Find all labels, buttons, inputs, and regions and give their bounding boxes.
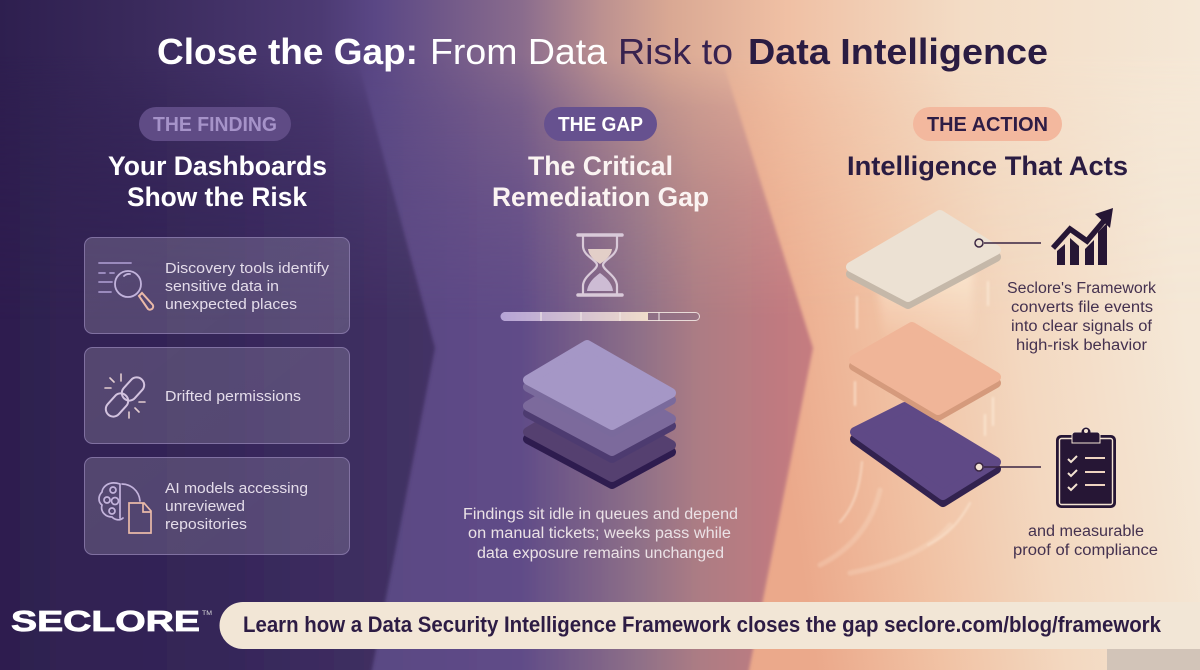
background: top colour band xyxy=(140,0,968,264)
text: drifted permissions: Drifted permissions xyxy=(165,388,301,405)
light streams behind plates xyxy=(820,270,993,573)
badge: the finding xyxy=(139,107,291,141)
heading: intelligence that acts: Intelligence That Acts xyxy=(847,151,1128,181)
logo: seclore: SECLORE xyxy=(11,606,200,638)
text: measurable proof xyxy=(1013,523,1158,559)
badge: the action xyxy=(913,107,1062,141)
plate: bottom xyxy=(855,407,996,502)
heading: the critical remediation gap xyxy=(492,151,709,212)
logo: seclore xyxy=(11,606,212,638)
footer cta bar xyxy=(220,602,1200,649)
chevron: finding panel xyxy=(0,0,435,670)
badge: the action: THE ACTION xyxy=(927,113,1048,136)
text: seclore's framework: converts file events xyxy=(1011,299,1153,316)
layer 1 xyxy=(528,345,671,432)
badge: the gap: THE GAP xyxy=(558,113,643,136)
layer 2 xyxy=(528,371,671,458)
connector: bottom plate to clipboard xyxy=(975,463,1041,471)
panel: the gap xyxy=(463,107,738,562)
heading: your dashboards show the risk xyxy=(108,151,327,212)
badge: the finding: THE FINDING xyxy=(153,113,277,136)
text: findings sit idle: data exposure remains unchanged xyxy=(477,545,724,562)
text: seclore's framework: Seclore's Framework xyxy=(1007,280,1156,297)
text: measurable proof: proof of compliance xyxy=(1013,542,1158,559)
text: seclore's framework: high-risk behavior xyxy=(1016,337,1147,354)
layer 3 xyxy=(528,397,671,484)
heading: the critical remediation gap: The Critical xyxy=(528,151,673,181)
icon: clipboard checklist xyxy=(1056,427,1116,508)
connector: top plate to chart xyxy=(975,239,1041,247)
text: ai models: AI models accessing xyxy=(165,480,308,497)
text: findings sit idle: Findings sit idle in queues and depend xyxy=(463,506,738,523)
progress bar xyxy=(500,312,700,321)
corner patch xyxy=(1107,649,1200,670)
title: Close the Gap: xyxy=(157,31,418,72)
title: Risk to xyxy=(618,31,733,72)
chevron: gap panel xyxy=(0,0,813,670)
card: discovery tools xyxy=(84,238,350,334)
plate: top xyxy=(851,215,996,304)
icon: broken link xyxy=(103,374,147,420)
icon: rising chart xyxy=(1053,208,1113,265)
text: findings sit idle: on manual tickets; weeks pass while xyxy=(468,525,731,542)
title: Data Intelligence xyxy=(748,31,1048,72)
heading: your dashboards show the risk: Show the Risk xyxy=(127,182,308,212)
text: discovery tools xyxy=(165,260,330,313)
text: discovery tools: unexpected places xyxy=(165,296,297,313)
title xyxy=(157,31,1048,72)
heading: the critical remediation gap: Remediation Gap xyxy=(492,182,709,212)
panel: the finding xyxy=(84,107,350,554)
icon: brain and document xyxy=(99,483,151,533)
stacked layers: idle findings xyxy=(528,345,671,484)
title: From Data xyxy=(430,31,608,72)
text: discovery tools: Discovery tools identify xyxy=(165,260,330,277)
text: ai models: unreviewed xyxy=(165,498,245,515)
text: findings sit idle xyxy=(463,506,738,562)
text: ai models xyxy=(165,480,308,533)
heading: your dashboards show the risk: Your Dashboards xyxy=(108,151,327,181)
icon: magnifier xyxy=(99,263,153,310)
card: drifted permissions xyxy=(84,348,350,444)
panel: the action xyxy=(820,107,1158,573)
text: seclore's framework xyxy=(1007,280,1156,354)
plate: middle xyxy=(854,327,996,416)
badge: the gap xyxy=(544,107,657,141)
card: ai models xyxy=(84,458,350,554)
text: discovery tools: sensitive data in xyxy=(165,278,279,295)
text: ai models: repositories xyxy=(165,516,247,533)
logo: seclore: TM xyxy=(202,611,212,617)
text: measurable proof: and measurable xyxy=(1028,523,1144,540)
icon: hourglass xyxy=(578,235,622,295)
text: seclore's framework: into clear signals of xyxy=(1011,318,1153,335)
